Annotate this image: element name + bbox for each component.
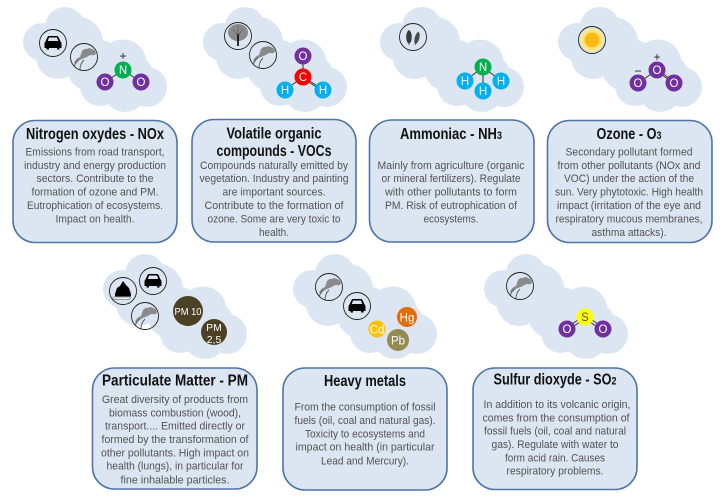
- particle: PM 2,5: 2,5: [207, 334, 221, 346]
- heading: [216, 126, 332, 160]
- heading: compounds - VOCs: [216, 143, 332, 160]
- description: [101, 394, 249, 486]
- description: impact on health (in particular: [296, 442, 435, 454]
- description: In addition to its volcanic origin,: [484, 399, 630, 411]
- molecule: ozone: O: [653, 65, 662, 77]
- icon: wood fire: [110, 278, 136, 304]
- molecule: NO2: +: [119, 49, 127, 63]
- card: heavy metals: [283, 368, 447, 490]
- description: From the consumption of fossil: [294, 402, 436, 414]
- panel: VOC illustration: [203, 7, 347, 112]
- particle: PM 2,5: PM: [206, 322, 222, 334]
- description: fossil fuels (oil, coal and natural: [484, 426, 626, 438]
- description: [24, 146, 166, 226]
- element: mercury: Hg: [400, 312, 414, 324]
- molecule: ozone: O: [670, 78, 679, 90]
- molecule: SO2: S: [581, 312, 589, 324]
- description: biomass combustion (wood),: [109, 407, 241, 419]
- particle: PM 2,5: [201, 319, 227, 346]
- icon: car: [40, 30, 66, 56]
- description: are important sources.: [222, 186, 326, 198]
- molecule: formaldehyde: O: [299, 51, 308, 63]
- description: form acid rain. Causes: [505, 452, 605, 464]
- description: formation of ozone and PM.: [32, 186, 158, 198]
- description: industry and energy production: [24, 160, 166, 172]
- heading: Nitrogen oxydes - NOx: [26, 126, 164, 143]
- molecule: NH3: [456, 58, 510, 100]
- molecule: formaldehyde: H: [281, 85, 289, 97]
- element: cadmium: [368, 320, 386, 338]
- icon: factory smoke: [250, 42, 276, 68]
- description: PM. Risk of eutrophication of: [385, 200, 518, 212]
- description: Compounds naturally emitted by: [200, 160, 348, 172]
- molecule: SO2: O: [563, 324, 572, 336]
- card: nitrogen oxides: [13, 120, 177, 242]
- particle: PM 10: PM 10: [174, 306, 202, 318]
- description: vegetation. Industry and painting: [200, 173, 348, 185]
- card: volatile organic compounds: [192, 120, 356, 242]
- description: Mainly from agriculture (organic: [378, 160, 525, 172]
- description: Emissions from road transport,: [26, 146, 164, 158]
- icon: factory smoke: [506, 272, 534, 300]
- description: from other pollutants (NOx and: [558, 160, 700, 172]
- description: comes from the consumption of: [482, 412, 630, 424]
- description: or mineral fertilizers). Regulate: [382, 173, 520, 185]
- panel: nitrogen oxides illustration: [23, 7, 167, 112]
- description: fine inhalable particles.: [120, 474, 230, 486]
- description: gas). Regulate with water to: [492, 439, 618, 451]
- description: [378, 160, 525, 226]
- card: particulate matter: [92, 368, 257, 489]
- heading: Heavy metals: [324, 373, 406, 390]
- element: lead: [387, 329, 409, 351]
- icon: car: [140, 268, 166, 294]
- molecule: ozone: O: [634, 78, 643, 90]
- card: ammonia: [370, 120, 534, 242]
- heading: Particulate Matter - PM: [102, 372, 248, 390]
- molecule: SO2: [558, 308, 612, 338]
- description: Toxicity to ecosystems and: [305, 428, 425, 440]
- molecule: ozone: −: [634, 64, 642, 78]
- heading: Sulfur dioxyde - SO2: [494, 372, 616, 388]
- description: Great diversity of products from: [102, 394, 248, 406]
- cloud: [380, 7, 524, 112]
- element: mercury: [397, 307, 417, 327]
- cloud: [293, 254, 437, 359]
- description: sun. Very phytotoxic. High health: [555, 186, 703, 198]
- molecule: NH3: N: [479, 62, 487, 74]
- element: cadmium: Cd: [370, 324, 384, 336]
- description: asthma attacks).: [592, 227, 666, 239]
- icon: car: [344, 292, 370, 320]
- icon: tree: [224, 22, 252, 50]
- particle: PM 10: [173, 296, 203, 326]
- molecule: NH3: H: [497, 76, 505, 88]
- cloud: [484, 254, 628, 359]
- heading: Ammoniac - NH3: [400, 126, 502, 143]
- cloud: [23, 7, 167, 112]
- molecule: ozone: +: [653, 50, 661, 64]
- description: sectors. Contribute to the: [36, 173, 154, 185]
- icon: factory smoke: [132, 302, 158, 330]
- description: Contribute to the formation of: [204, 200, 344, 212]
- description: [482, 399, 630, 478]
- icon: wheat: [400, 24, 426, 50]
- description: health.: [259, 227, 289, 239]
- description: health (lungs), in particular for: [106, 461, 244, 473]
- panel: sulfur dioxide illustration: [484, 254, 628, 359]
- card: sulfur dioxide: [473, 368, 637, 490]
- molecule: NH3: H: [479, 86, 487, 98]
- description: Secondary pollutant formed: [566, 146, 692, 158]
- panel: heavy metals illustration: [293, 254, 437, 359]
- description: transport.... Emitted directly or: [105, 421, 245, 433]
- description: other pollutants. High impact on: [101, 447, 249, 459]
- description: VOC) under the action of the: [564, 173, 694, 185]
- description: respiratory problems.: [506, 466, 604, 478]
- molecule: formaldehyde: [276, 48, 332, 98]
- molecule: NH3: H: [461, 76, 469, 88]
- molecule: NO2: N: [119, 65, 127, 77]
- molecule: formaldehyde: H: [319, 85, 327, 97]
- heading: Volatile organic: [226, 126, 322, 142]
- description: [294, 402, 436, 468]
- molecule: formaldehyde: C: [299, 72, 307, 84]
- panel: ozone illustration: [558, 7, 702, 112]
- molecule: NO2: O: [137, 77, 146, 89]
- description: fuels (oil, coal and natural gas).: [294, 415, 436, 427]
- description: [555, 146, 703, 239]
- description: Eutrophication of ecosystems.: [27, 200, 163, 212]
- description: Lead and Mercury).: [321, 456, 409, 468]
- heading: Ozone - O3: [596, 126, 662, 143]
- panel: particulate matter illustration: [103, 254, 247, 359]
- description: impact (irritation of the eye and: [557, 200, 701, 212]
- description: formed by the transformation of: [102, 434, 249, 446]
- cloud: [203, 7, 347, 112]
- description: Impact on health.: [56, 214, 134, 226]
- molecule: NO2: [96, 49, 150, 90]
- molecule: NO2: O: [101, 77, 110, 89]
- icon: factory smoke: [316, 274, 342, 300]
- molecule: SO2: O: [599, 324, 608, 336]
- icon: factory smoke: [70, 44, 98, 70]
- cloud: [558, 7, 702, 112]
- card: ozone: [548, 120, 712, 242]
- description: [200, 160, 348, 239]
- cloud: [103, 254, 247, 359]
- panel: ammonia illustration: [380, 7, 524, 112]
- element: lead: Pb: [391, 336, 405, 348]
- description: ozone. Some are very toxic to: [208, 214, 340, 226]
- description: with other pollutants to form: [384, 186, 517, 198]
- molecule: ozone: [630, 50, 682, 92]
- description: ecosystems.: [424, 214, 478, 226]
- icon: sun: [578, 26, 606, 54]
- description: respiratory mucous membranes,: [556, 214, 702, 226]
